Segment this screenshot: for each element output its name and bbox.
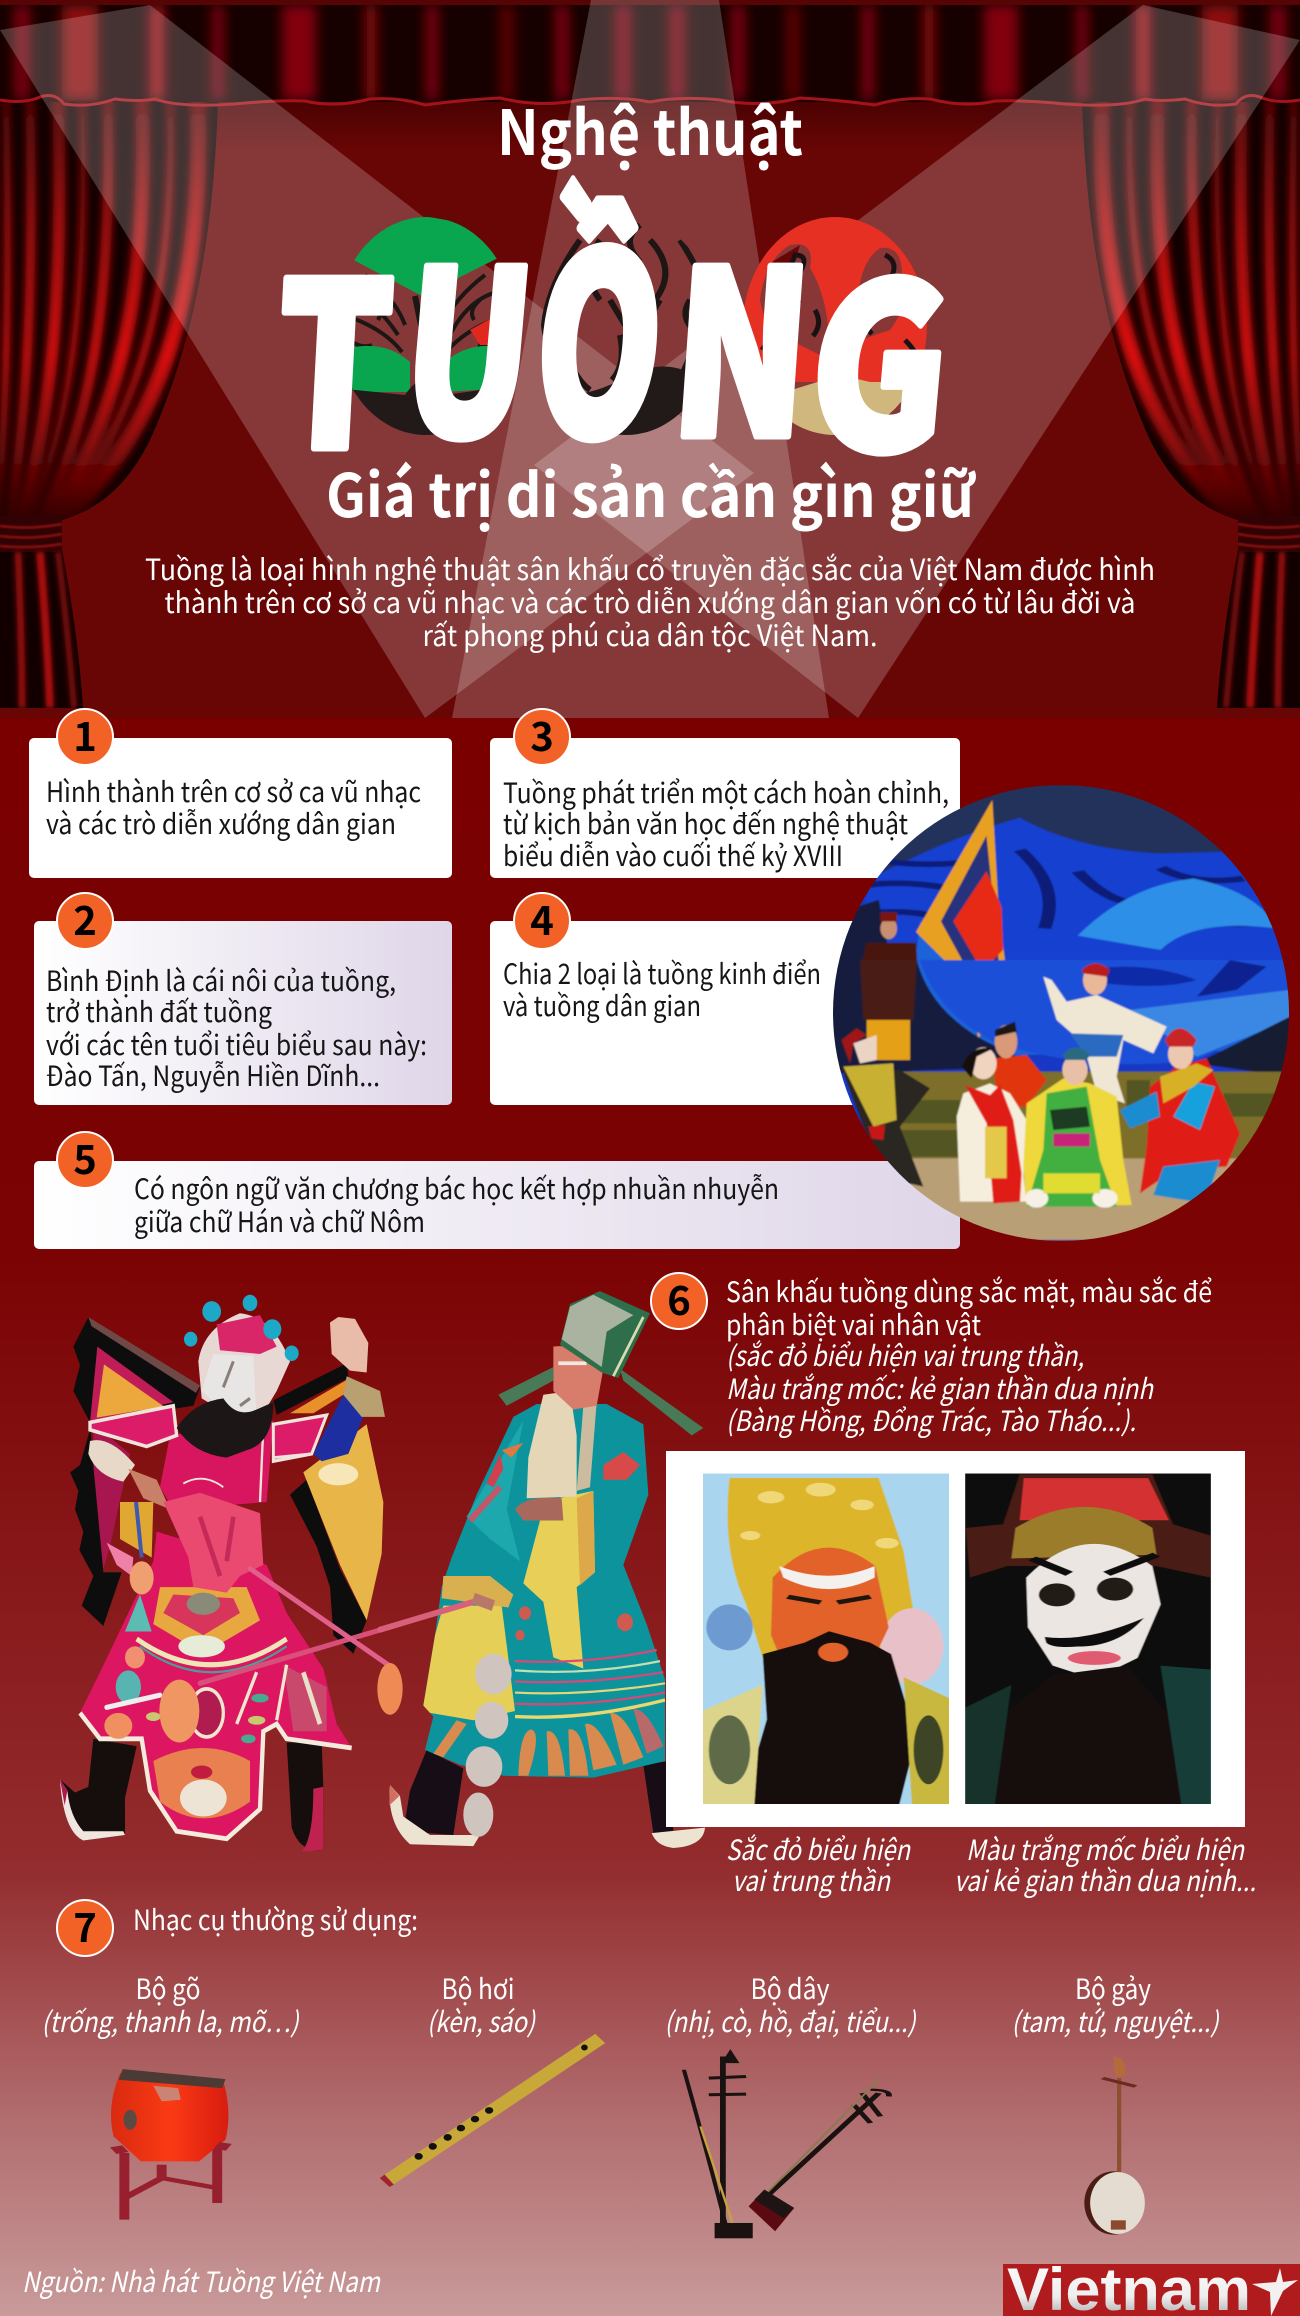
card 3: từ kịch bản văn học đến nghệ thuật [503,803,908,843]
yellow skirt panel [423,1606,515,1720]
face captions: vai trung thần [732,1860,892,1900]
left curtain [0,5,650,710]
card 3: Tuồng phát triển một cách hoàn chỉnh, [503,772,949,812]
teal robe [423,1404,665,1778]
blue sleeve [313,1395,363,1461]
white face photo [965,1474,1211,1804]
tuong masks [336,216,930,440]
card 4 [490,889,960,1105]
red face photo [701,1474,953,1804]
embroidery [104,1587,327,1818]
section 6 text: Màu trắng mốc: kẻ gian thần dua nịnh [726,1368,1155,1408]
instrument labels: Bộ gõ [136,1968,200,2008]
card 3: biểu diễn vào cuối thế kỷ XVIII [503,835,843,875]
intro paragraph [145,547,1155,655]
back flags [70,1317,383,1654]
left warrior figure [60,1295,403,1852]
face captions: Màu trắng mốc biểu hiện [966,1829,1246,1869]
card 5 [34,1128,960,1249]
source: Nguồn: Nhà hát Tuồng Việt Nam [22,2261,381,2301]
card 1 [29,705,452,878]
stage photo circle [830,785,1297,1241]
icon: three-string lute [1084,2056,1145,2235]
card 4: Chia 2 loại là tuồng kinh điển [503,953,821,993]
spotlight beams [0,0,1300,718]
robe hem stripes and arches [515,1650,665,1717]
soldier [860,960,917,1060]
big brush title: TUỒNG: Ồ [525,147,676,509]
raised hand [330,1317,368,1372]
hand [515,1498,563,1520]
card 2: 2 [73,889,97,947]
card 5: 5 [73,1128,97,1186]
singer in white [1043,963,1167,1103]
red mask [743,217,930,440]
stage header background [0,0,1300,720]
card 3 [490,705,960,878]
instrument labels: Bộ dây [750,1968,830,2008]
robe [80,1532,352,1839]
cuffs and sash [442,1491,595,1668]
instrument labels: (nhị, cò, hồ, đại, tiểu...) [664,2001,917,2041]
icon: flute [380,2034,605,2187]
card 4: và tuồng dân gian [503,985,701,1025]
legs and shoes [60,1739,323,1852]
card 5: giữa chữ Hán và chữ Nôm [134,1201,425,1241]
section 7 badge [57,1896,113,1956]
staffs and orange tassels [107,1569,400,1707]
white-robed kneeling player [957,1047,1027,1203]
card 2: trở thành đất tuồng [46,991,272,1031]
right red and blue player [1120,1028,1240,1203]
red-robed player [993,1022,1047,1107]
section 6 text: (Bàng Hồng, Đổng Trác, Tào Tháo...). [726,1400,1136,1440]
big brush title: TUỒNG: U [392,172,547,502]
torso [88,1406,327,1509]
card 1: 1 [73,705,97,763]
soldier head [862,911,918,962]
card 4: 4 [530,889,554,947]
right elder figure [380,1291,705,1848]
big brush title: TUỒNG: T [269,183,402,514]
big brush title: TUỒNG: G [798,186,965,516]
card 5: Có ngôn ngữ văn chương bác học kết hợp nhuần nhuyễn [134,1168,779,1208]
right curtain [650,5,1300,710]
instrument labels [42,1968,1220,2041]
green mask [352,217,497,435]
instrument labels: Bộ hơi [442,1968,514,2008]
instrument labels: (tam, tứ, nguyệt...) [1012,2001,1220,2041]
card 1: Hình thành trên cơ sở ca vũ nhạc [46,771,421,811]
section 6 text [726,1271,1212,1440]
section 6 text: Sân khấu tuồng dùng sắc mặt, màu sắc để [726,1271,1212,1311]
big brush title: TUỒNG: N [663,171,823,502]
section 6 badge [651,1269,707,1329]
icon: drum [111,2069,228,2220]
card 2: Đào Tấn, Nguyễn Hiền Dĩnh... [46,1055,380,1095]
hat [498,1291,703,1435]
section 6 text: (sắc đỏ biểu hiện vai trung thần, [726,1335,1084,1375]
instrument labels: Bộ gảy [1075,1968,1151,2008]
left kneeling player [842,1028,930,1187]
main title line: Nghệ thuật: Nghệ thuật [497,83,803,173]
face captions [726,1829,1256,1900]
black mask [541,222,697,435]
icon: two-string fiddles [684,2049,889,2238]
instrument labels: (trống, thanh la, mõ…) [42,2001,300,2041]
tassels on left hip [125,1561,154,1632]
section 7 badge: 7 [73,1896,97,1954]
flag [916,800,1007,1039]
subtitle: Giá trị di sản cần gìn giữ [326,448,977,535]
pink sash [163,1493,263,1593]
beard and face [527,1346,603,1498]
body background [0,718,1300,2316]
central yellow-cloaked player [1023,1047,1132,1208]
card 3: 3 [530,705,554,763]
section 6 text: phân biệt vai nhân vật [726,1304,981,1344]
section 7 heading: Nhạc cụ thường sử dụng: [133,1899,418,1939]
card 2: với các tên tuổi tiêu biểu sau này: [46,1024,427,1064]
intro paragraph: thành trên cơ sở ca vũ nhạc và các trò diễn xướng dân gian vốn có từ lâu đời và [164,580,1136,622]
big brush title: TUỒNG [269,147,965,516]
intro paragraph: rất phong phú của dân tộc Việt Nam. [422,613,878,655]
card 1: và các trò diễn xướng dân gian [46,803,396,843]
instrument labels: (kèn, sáo) [427,2001,536,2041]
beard and head [177,1295,299,1458]
boots [389,1750,705,1848]
staff and tassels [380,1598,512,1837]
left tie and tassels [107,1502,153,1576]
card 2 [34,889,452,1105]
face panel [666,1451,1245,1827]
section 6 badge: 6 [667,1269,691,1327]
face captions: vai kẻ gian thần dua nịnh... [954,1860,1256,1900]
card 2: Bình Định là cái nôi của tuồng, [46,960,396,1000]
face captions: Sắc đỏ biểu hiện [726,1829,912,1869]
embroidered dragons [470,1443,640,1520]
intro paragraph: Tuồng là loại hình nghệ thuật sân khấu cổ truyền đặc sắc của Việt Nam được hình [145,547,1155,589]
